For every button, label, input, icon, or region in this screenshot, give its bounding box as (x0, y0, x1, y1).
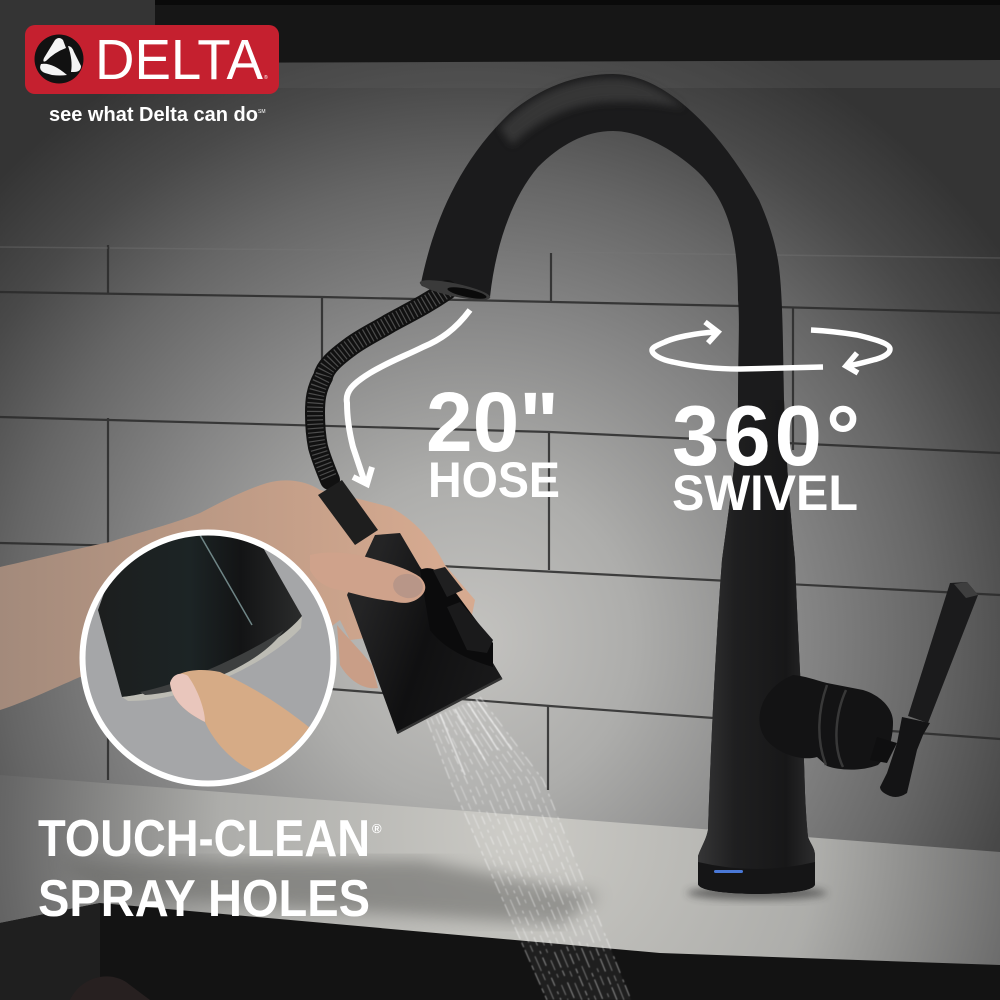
countertop (0, 775, 1000, 1000)
label: 20 inch hose: HOSE (428, 452, 560, 508)
callout: touch-clean inset (82, 520, 334, 784)
logo mark (34, 34, 84, 84)
brand logo: SM (258, 109, 266, 115)
brand logo: DELTA (95, 28, 263, 92)
label: touch-clean spray holes: TOUCH-CLEAN (38, 810, 370, 868)
label: 20 inch hose: 20" (426, 375, 559, 469)
brand logo: see what Delta can do (49, 104, 258, 126)
brand logo: ® (264, 74, 268, 81)
faucet spout and body (421, 74, 815, 894)
label: touch-clean spray holes (38, 810, 382, 928)
faucet handle (759, 582, 978, 797)
label: touch-clean spray holes: SPRAY HOLES (38, 870, 370, 928)
arrow: 360 degree swivel (652, 322, 890, 373)
spray head (318, 480, 502, 733)
brand logo (25, 25, 279, 126)
label: 360 degree swivel: 360° (672, 389, 860, 484)
thumb (310, 553, 425, 603)
spout tip (418, 276, 492, 304)
hand holding spray head (0, 480, 475, 710)
water spray (427, 697, 631, 1000)
label: 360 degree swivel: SWIVEL (672, 465, 858, 521)
inset nozzle and finger (98, 520, 310, 775)
label: touch-clean spray holes: ® (372, 821, 382, 836)
pull-down hose (315, 290, 447, 480)
arrow: hose length (347, 310, 470, 484)
